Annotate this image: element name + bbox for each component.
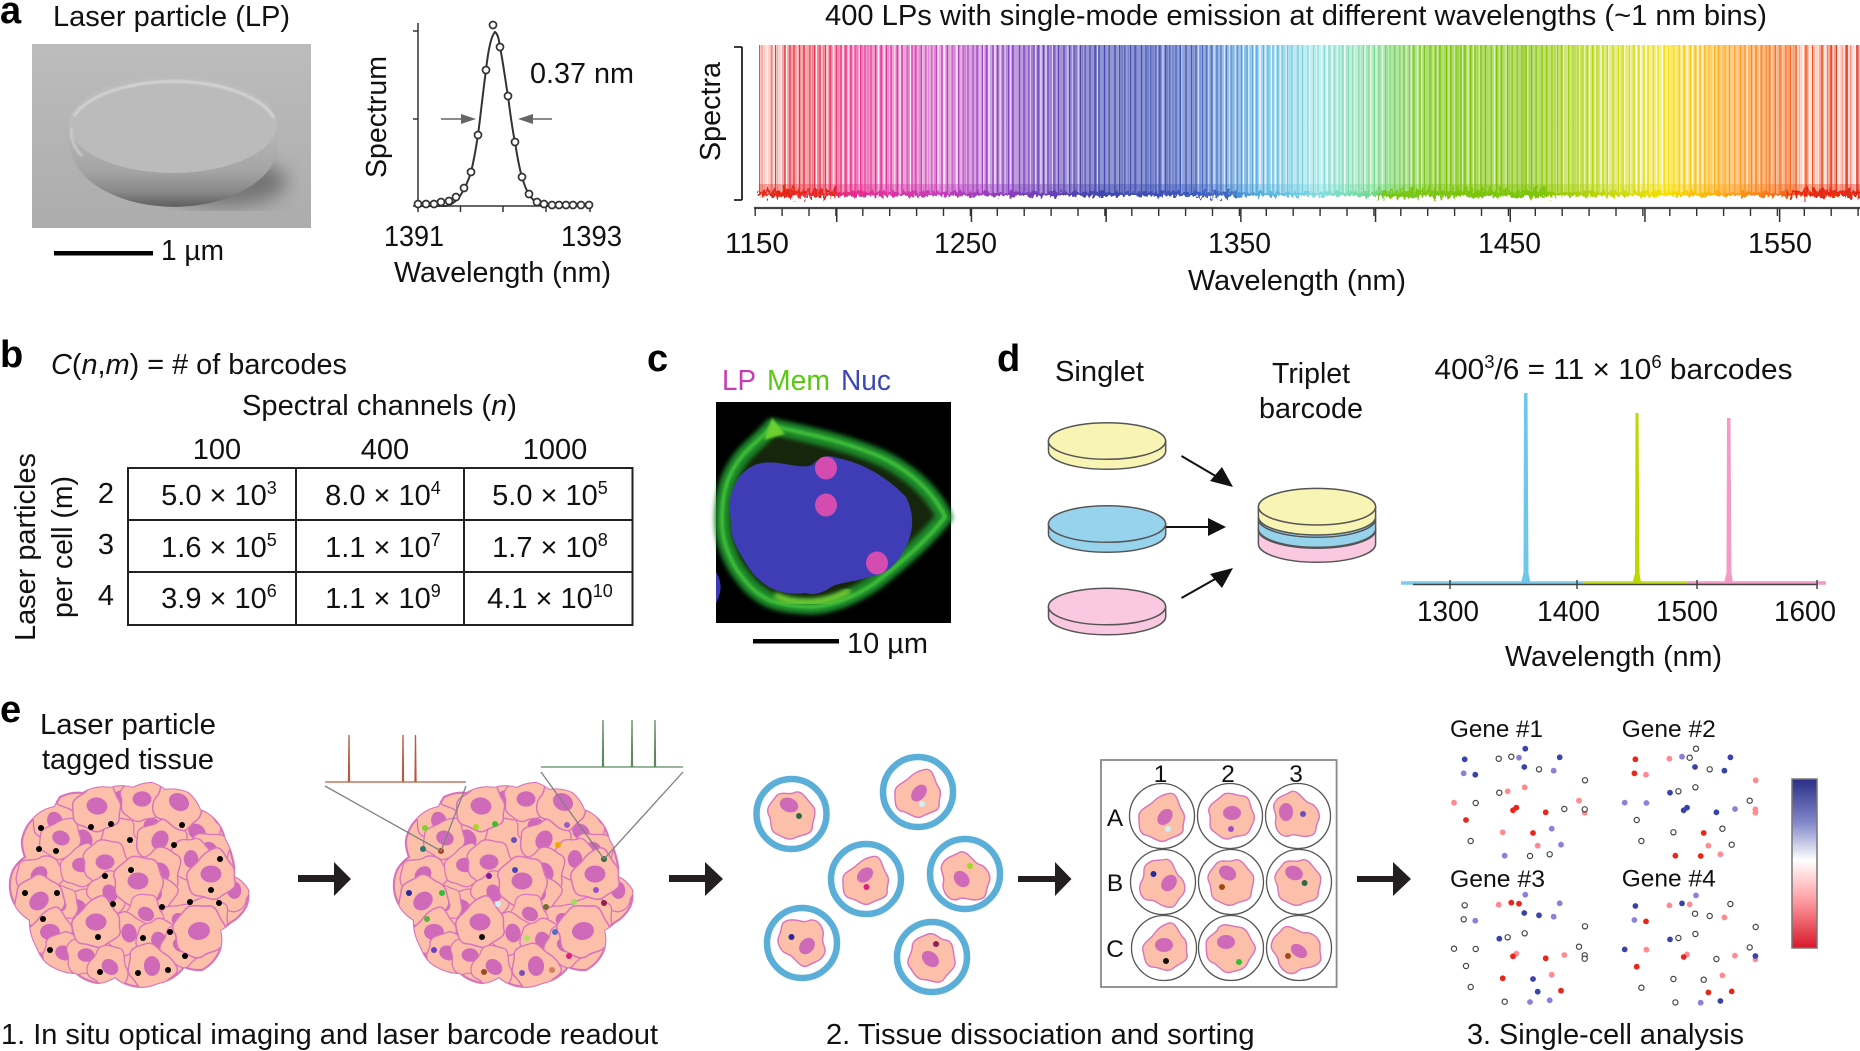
- heading: barcode count: barcodes: [1662, 354, 1792, 386]
- legend: LP Mem Nuc: LP: [722, 365, 756, 397]
- heading: 400 LPs: 400 LPs with single-mode emission at different wavelengths (~1 nm bins): [825, 0, 1767, 32]
- gene 3 map: [1450, 866, 1588, 1005]
- axis title: laser particles per cell: per cell (m): [47, 476, 79, 618]
- gene 3 map: Gene #3: [1450, 866, 1545, 893]
- heading: number of barcodes: C(n,m) = # of barcodes: [51, 349, 347, 381]
- gene 2 map: Gene #2: [1622, 716, 1716, 743]
- scale bar 1 micron: [54, 235, 224, 267]
- legend: LP Mem Nuc: Nuc: [841, 365, 891, 397]
- heading: barcode count: 6: [1651, 352, 1662, 372]
- rainbow spectra chart: Wavelength (nm): [1188, 265, 1406, 297]
- well plate: A: [1107, 805, 1124, 832]
- rainbow spectra chart: 1450: [1478, 228, 1541, 260]
- single laser spectrum chart: Spectrum: [361, 56, 393, 178]
- scale bar 10 micron: 10 µm: [847, 628, 928, 660]
- panel label c: c: [647, 338, 668, 380]
- label: triplet barcode: barcode: [1259, 393, 1363, 425]
- axis title: laser particles per cell: Laser particles: [10, 453, 42, 641]
- heading: barcode count: /6 = 11 × 10: [1495, 354, 1651, 386]
- singlet disks: [1048, 423, 1166, 635]
- barcode table: 400: [361, 434, 409, 466]
- caption 2: 2. Tissue dissociation and sorting: [826, 1019, 1254, 1051]
- panel label d: d: [997, 338, 1020, 380]
- single laser spectrum chart: 1393: [561, 221, 622, 253]
- rainbow spectra chart: 1250: [934, 228, 997, 260]
- triplet spectrum chart: [1401, 393, 1836, 673]
- well plate: 3: [1289, 761, 1303, 788]
- tissue with coloured barcode particles: [389, 768, 642, 997]
- label: triplet barcode: Triplet: [1272, 358, 1350, 390]
- well plate: C: [1106, 936, 1124, 963]
- single laser spectrum chart: 0.37 nm: [530, 58, 634, 90]
- rainbow spectra chart: 1350: [1208, 228, 1271, 260]
- barcode table: [98, 434, 632, 625]
- gene 4 map: [1622, 866, 1758, 1006]
- barcode table: 1.1 × 10: [325, 532, 431, 564]
- arrow 1: [298, 862, 351, 896]
- barcode table: 100: [193, 434, 241, 466]
- barcode table: 6: [267, 581, 277, 601]
- barcode table: 3: [98, 529, 114, 561]
- barcode table: 3.9 × 10: [161, 583, 267, 615]
- barcode table: 1000: [523, 434, 587, 466]
- dissociated cells in droplets: [756, 757, 1000, 992]
- barcode table: 8.0 × 10: [325, 480, 431, 512]
- barcode table: 8: [598, 530, 608, 550]
- barcode table: 4: [431, 478, 441, 498]
- barcode table: 5.0 × 10: [492, 480, 598, 512]
- scale bar 10 micron: [753, 628, 928, 660]
- gene 1 map: [1450, 716, 1588, 859]
- heading: laser particle: Laser particle (LP): [53, 1, 290, 33]
- arrow 3: [1018, 862, 1072, 896]
- barcode table: 1.7 × 10: [492, 532, 598, 564]
- gene 2 map: [1622, 716, 1759, 859]
- panel label e: e: [0, 689, 21, 731]
- gene 1 map: Gene #1: [1450, 716, 1543, 743]
- barcode table: 1.1 × 10: [325, 583, 431, 615]
- single laser spectrum chart: 1391: [384, 221, 444, 253]
- barcode table: 1.6 × 10: [161, 532, 267, 564]
- triplet spectrum chart: 1300: [1417, 596, 1479, 628]
- heading: barcode count: 3: [1484, 352, 1495, 372]
- arrow 2: [669, 862, 723, 896]
- single laser spectrum chart: [361, 22, 634, 289]
- well plate: 2: [1221, 761, 1235, 788]
- arrows to stack: [1166, 456, 1233, 598]
- label: laser particle tagged tissue: [40, 709, 216, 776]
- barcode table: 2: [98, 478, 114, 510]
- label: singlet: Singlet: [1055, 356, 1144, 388]
- barcode table: 5: [598, 478, 608, 498]
- single laser spectrum chart: Wavelength (nm): [394, 257, 611, 289]
- heading: barcode count: 400: [1434, 354, 1483, 386]
- fluorescence cell image: [716, 402, 951, 623]
- label: triplet barcode: [1259, 358, 1363, 425]
- well plate: 1: [1154, 761, 1167, 788]
- axis title: laser particles per cell: [10, 453, 79, 641]
- well plate: [1101, 760, 1337, 987]
- barcode table: 3: [267, 478, 277, 498]
- rainbow spectra chart: 1550: [1748, 228, 1812, 260]
- axis title: spectral channels: Spectral channels (n): [242, 390, 517, 422]
- arrow 4: [1357, 862, 1411, 896]
- scale bar 1 micron: 1 µm: [161, 235, 224, 267]
- barcode table: 4.1 × 10: [487, 583, 593, 615]
- barcode table: 5.0 × 10: [161, 480, 267, 512]
- tissue with black particles: [5, 768, 258, 997]
- triplet spectrum chart: 1500: [1656, 596, 1718, 628]
- inset spectrum red barcode: [325, 735, 466, 851]
- caption 1: 1. In situ optical imaging and laser barcode readout: [1, 1019, 658, 1051]
- barcode table: 4: [98, 580, 114, 612]
- barcode table: 9: [431, 581, 441, 601]
- rainbow spectra chart: [695, 45, 1860, 297]
- legend: LP Mem Nuc: [722, 365, 891, 397]
- legend: LP Mem Nuc: Mem: [767, 365, 830, 397]
- inset spectrum green barcode: [541, 720, 683, 859]
- rainbow spectra chart: Spectra: [695, 61, 727, 161]
- gene 4 map: Gene #4: [1622, 866, 1716, 893]
- label: laser particle tagged tissue: Laser particle: [40, 709, 216, 741]
- triplet spectrum chart: 1400: [1537, 596, 1600, 628]
- label: laser particle tagged tissue: tagged tissue: [42, 744, 214, 776]
- expression colour bar: [1792, 779, 1817, 948]
- triplet spectrum chart: Wavelength (nm): [1505, 641, 1722, 673]
- micrograph of laser particle: [32, 44, 311, 228]
- barcode table: 10: [593, 581, 613, 601]
- triplet spectrum chart: 1600: [1774, 596, 1836, 628]
- panel label b: b: [0, 334, 23, 376]
- rainbow spectra chart: 1150: [725, 228, 789, 260]
- caption 3: 3. Single-cell analysis: [1467, 1019, 1744, 1051]
- barcode table: 5: [267, 530, 277, 550]
- triplet stack: [1258, 488, 1376, 562]
- well plate: B: [1107, 870, 1123, 897]
- barcode table: 7: [431, 530, 441, 550]
